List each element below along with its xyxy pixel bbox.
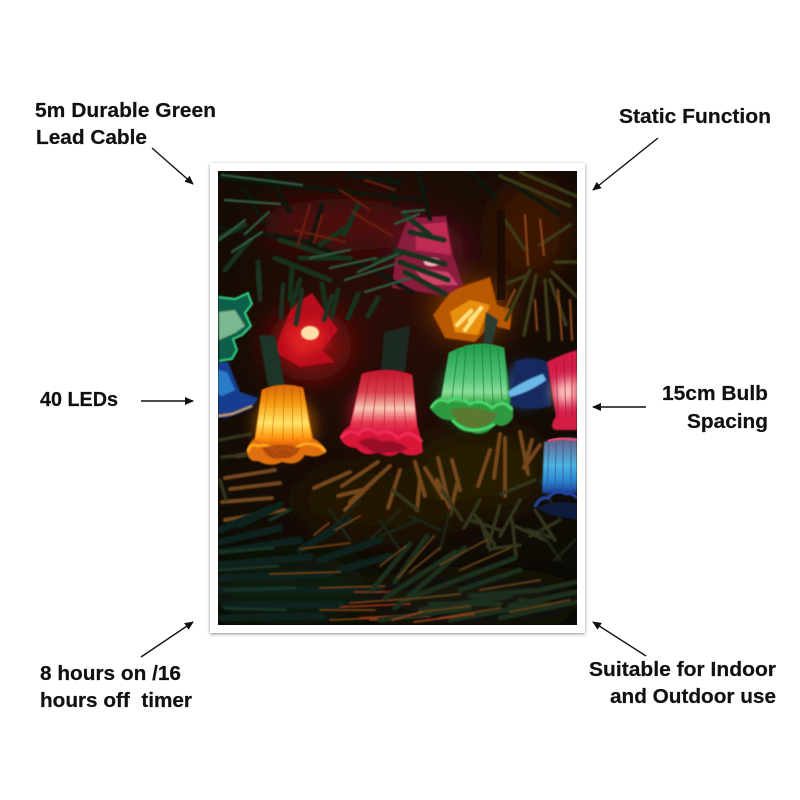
photo frame — [210, 163, 585, 633]
light: red upper bell — [274, 293, 338, 367]
label: cable: 5m Durable Green — [35, 100, 216, 122]
light: red bell — [340, 370, 423, 456]
label: timer: 8 hours on /16 — [40, 663, 181, 685]
lower needles, orange lit — [222, 432, 540, 520]
light: blue left — [218, 362, 258, 418]
label: bulb spacing: Spacing — [687, 411, 768, 433]
arrow: timer — [141, 622, 193, 657]
foreground needles, lower right fan — [372, 536, 576, 620]
label: timer — [40, 663, 192, 712]
light cable sockets — [259, 312, 498, 386]
label: cable — [35, 100, 216, 149]
foreground needles, lower left cluster — [220, 505, 390, 618]
light: red right — [547, 350, 577, 430]
light: orange upper bell — [433, 277, 512, 342]
needles over upper red light — [258, 270, 332, 324]
label: static function: Static Function — [619, 106, 771, 128]
light: green bell — [430, 344, 513, 434]
background glows — [210, 180, 580, 625]
label: LED count: 40 LEDs — [40, 389, 118, 411]
arrow: bulb spacing — [593, 406, 646, 408]
arrow: static function — [593, 138, 658, 190]
arrow: green lead cable — [152, 148, 193, 184]
light: teal left — [218, 292, 253, 362]
arrow: indoor and outdoor use — [593, 622, 646, 656]
label: indoor and outdoor use — [589, 659, 776, 708]
label: cable: Lead Cable — [36, 127, 147, 149]
light: pink upper bell — [392, 216, 463, 296]
glow halos around lights — [253, 356, 545, 455]
upper right branch — [500, 172, 577, 340]
label: indoor and outdoor use: Suitable for Indoor — [589, 659, 776, 681]
infographic canvas — [36, 102, 776, 708]
label: timer: hours off timer — [40, 690, 192, 712]
upper branches, needles — [218, 171, 560, 292]
arrow: 40 LEDs — [141, 400, 193, 402]
light: blue right — [535, 438, 577, 520]
label: bulb spacing: 15cm Bulb — [662, 383, 768, 405]
light: blue middle — [507, 358, 551, 409]
label: indoor and outdoor use: and Outdoor use — [610, 686, 776, 708]
label: bulb spacing — [662, 383, 768, 433]
photo: Christmas tree with bell-shaped lights — [210, 171, 580, 625]
light: orange bell — [247, 385, 326, 465]
